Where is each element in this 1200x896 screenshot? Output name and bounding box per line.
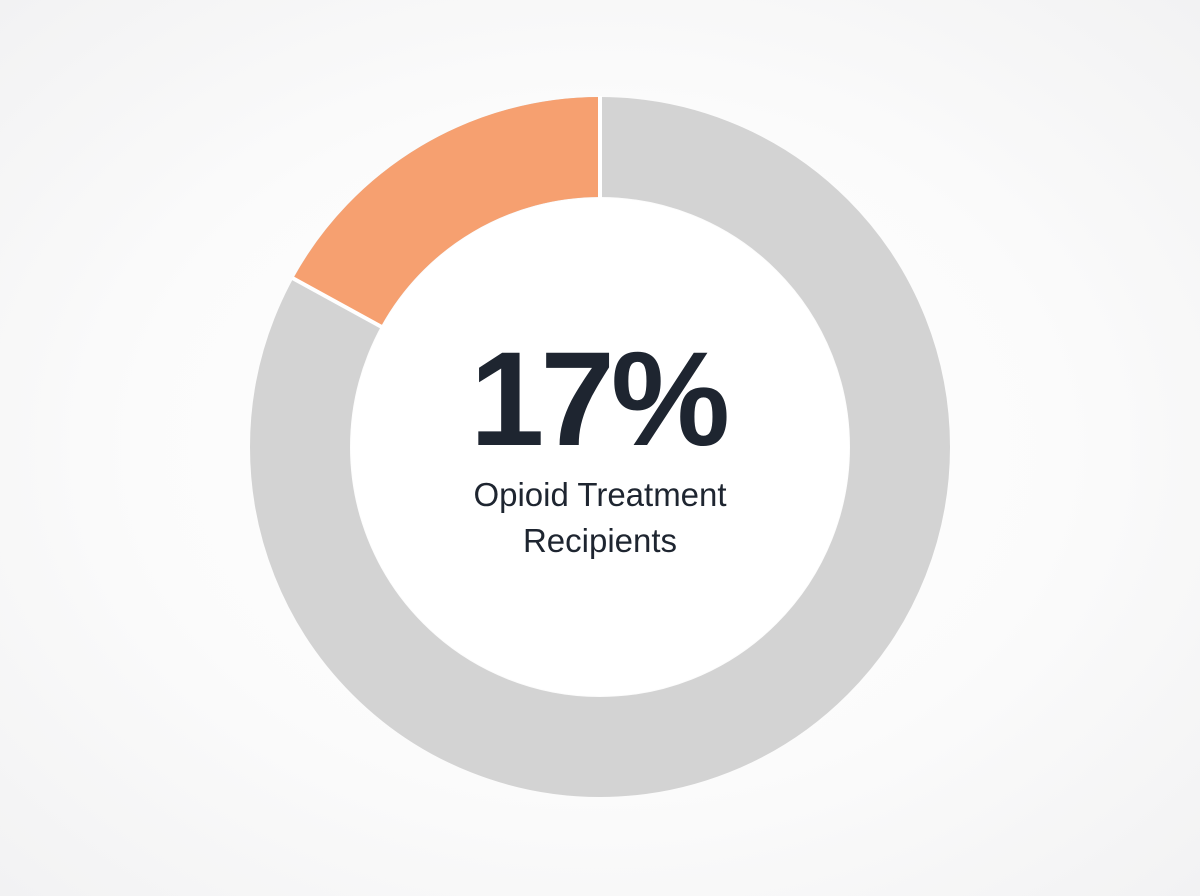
big percentage: 17%	[470, 325, 727, 474]
label text: Recipients	[523, 522, 677, 559]
donut ring: remainder (grey)	[300, 147, 900, 747]
label text	[473, 476, 727, 559]
donut segment: 17% orange	[337, 147, 600, 302]
inner white circle	[351, 198, 849, 696]
label text: Opioid Treatment	[473, 476, 727, 513]
